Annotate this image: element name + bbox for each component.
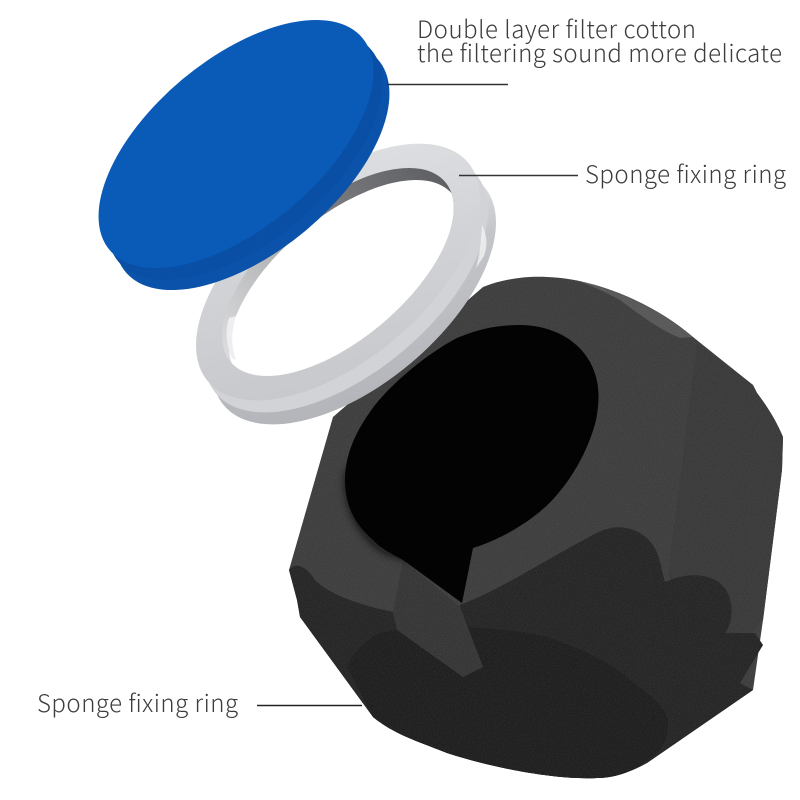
leader line	[459, 174, 578, 176]
foam lower lobes	[289, 527, 763, 778]
label: Sponge fixing ring	[585, 155, 786, 190]
foam surface grain	[280, 270, 790, 785]
disc lower layer	[72, 0, 432, 336]
foam outer silhouette	[289, 277, 783, 778]
foam central cavity	[345, 325, 598, 603]
foam cavity soft lower edge	[346, 470, 410, 560]
ring rim groove	[159, 107, 533, 461]
ring outer rim	[167, 119, 541, 473]
silver sponge fixing ring	[196, 144, 496, 424]
foam angled notch strip	[393, 560, 483, 677]
ring inner wall	[187, 130, 489, 414]
disc middle layer	[65, 0, 425, 326]
ring left gloss	[227, 316, 236, 360]
ring front face	[151, 95, 525, 449]
foam body	[280, 270, 790, 785]
label line one: Double layer filter cotton	[417, 10, 696, 45]
callout: filter cotton	[387, 10, 782, 84]
foam side facet	[668, 343, 783, 640]
leader line	[387, 84, 508, 86]
leader line	[257, 704, 362, 706]
ring right gloss	[476, 225, 486, 268]
label line two: the filtering sound more delicate	[417, 34, 782, 69]
foam lit top edge	[575, 280, 693, 338]
ring opening	[229, 180, 454, 376]
disc top face	[56, 0, 416, 314]
blue filter cotton disc	[56, 0, 432, 336]
label: Sponge fixing ring	[37, 684, 238, 719]
foam darkest lobe	[347, 627, 668, 778]
